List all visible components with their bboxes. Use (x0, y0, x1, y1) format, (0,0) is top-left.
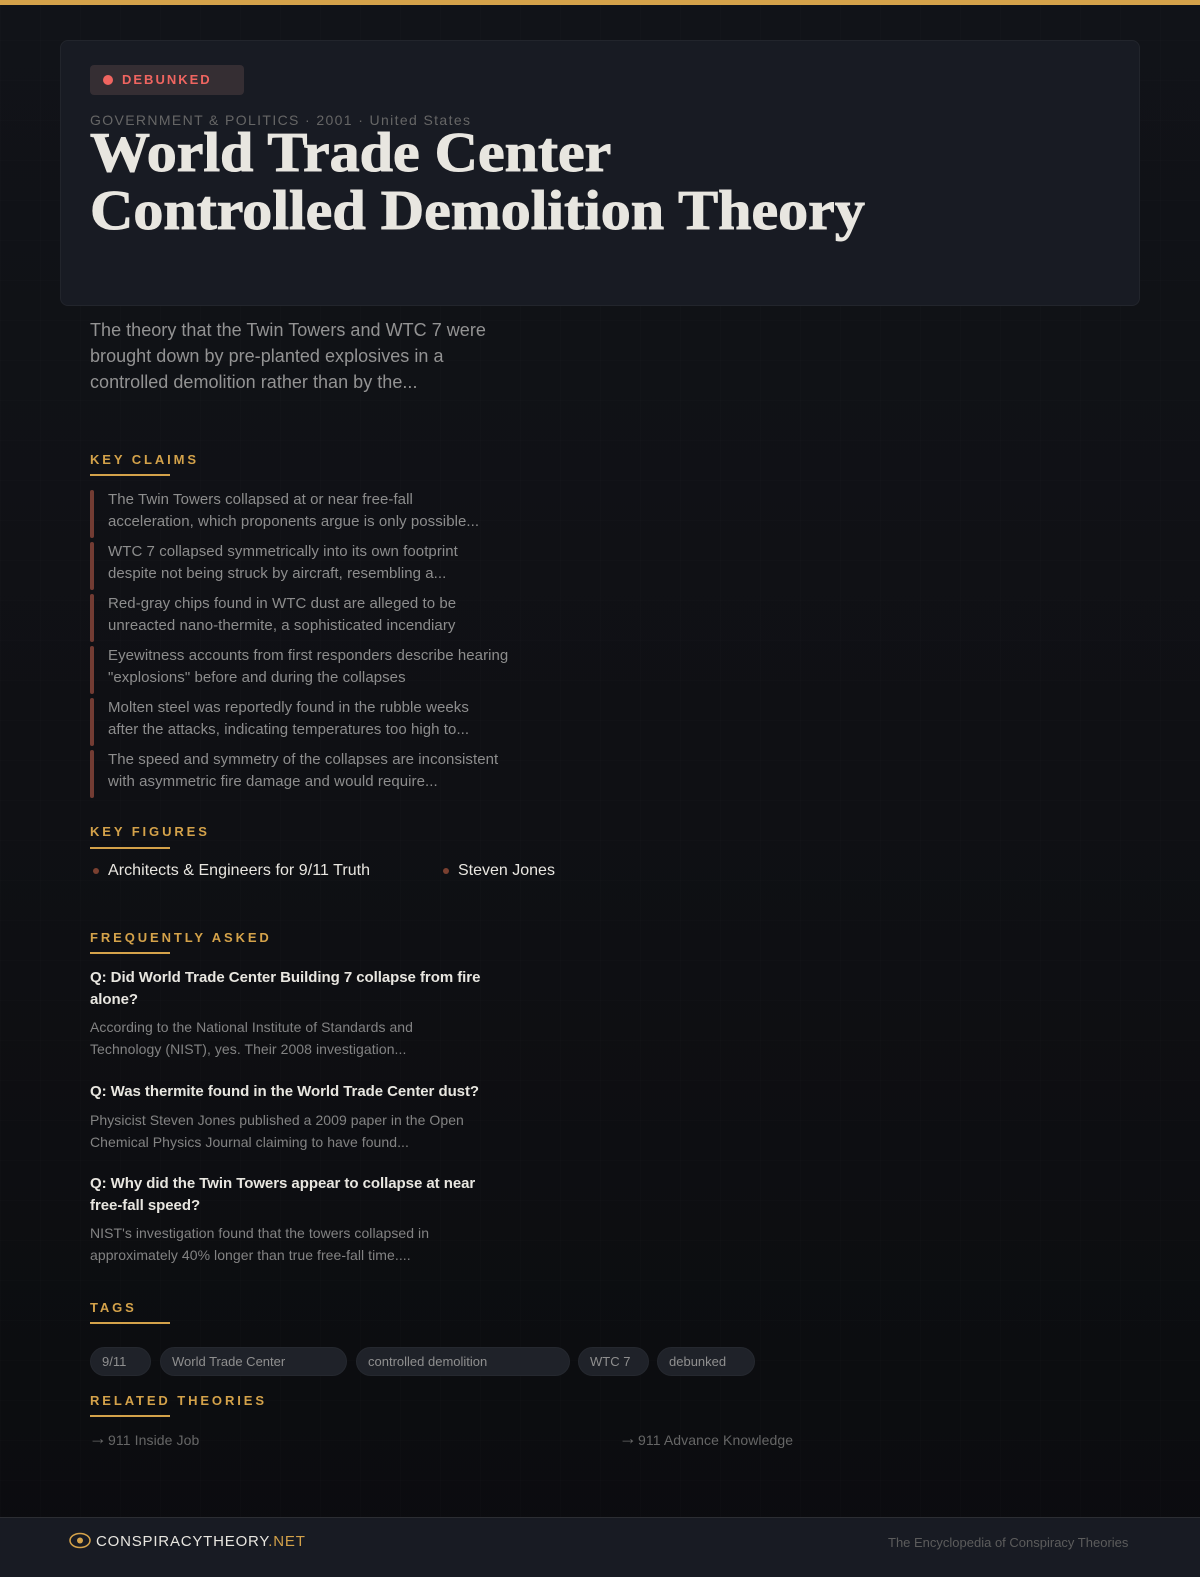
footer (0, 1517, 1200, 1577)
tag (356, 1347, 570, 1376)
faq 3: approximately 40% longer than true free-fall time.... (90, 1247, 411, 1263)
faq 1: alone? (90, 991, 138, 1008)
related link 2: → (619, 1428, 637, 1448)
faq 1: According to the National Institute of Standards and (90, 1019, 413, 1035)
tag: World Trade Center (172, 1354, 285, 1369)
claim 6: with asymmetric fire damage and would require... (108, 773, 438, 790)
related link 1: → (89, 1428, 107, 1448)
claim 1: The Twin Towers collapsed at or near free-fall (108, 491, 413, 508)
title: Controlled Demolition Theory (90, 180, 865, 242)
faq 2: Physicist Steven Jones published a 2009 paper in the Open (90, 1112, 464, 1128)
heading: key claims: KEY CLAIMS (90, 452, 199, 467)
claim 3: unreacted nano-thermite, a sophisticated incendiary (108, 617, 455, 634)
claim 1 (90, 490, 479, 538)
related link 1 (89, 1428, 199, 1448)
claim 3 (90, 594, 456, 642)
tag (657, 1347, 755, 1376)
summary text: brought down by pre-planted explosives in a (90, 346, 444, 366)
claim 6 (90, 750, 498, 798)
heading: frequently asked: FREQUENTLY ASKED (90, 930, 272, 945)
related link 2: 911 Advance Knowledge (638, 1432, 793, 1448)
summary text: controlled demolition rather than by the... (90, 372, 417, 392)
claim 2: despite not being struck by aircraft, resembling a... (108, 565, 446, 582)
tag: WTC 7 (590, 1354, 630, 1369)
tag: controlled demolition (368, 1354, 487, 1369)
claim 3: Red-gray chips found in WTC dust are alleged to be (108, 595, 456, 612)
claim 4: Eyewitness accounts from first responders describe hearing (108, 647, 508, 664)
faq 3: Q: Why did the Twin Towers appear to collapse at near (90, 1175, 475, 1192)
claim 4 (90, 646, 508, 694)
claim 5: Molten steel was reportedly found in the rubble weeks (108, 699, 469, 716)
summary text: The theory that the Twin Towers and WTC 7 were (90, 320, 486, 340)
claim 2: WTC 7 collapsed symmetrically into its own footprint (108, 543, 458, 560)
related link 1: 911 Inside Job (108, 1432, 199, 1448)
panel: header card (60, 40, 1140, 306)
faq 1: Q: Did World Trade Center Building 7 collapse from fire (90, 969, 480, 986)
faq 2: Q: Was thermite found in the World Trade Center dust? (90, 1083, 479, 1100)
faq 2 (90, 1083, 479, 1150)
wordmark: CONSPIRACYTHEORY.NET (96, 1533, 306, 1550)
panel: key claims list (90, 490, 508, 798)
title (90, 122, 865, 242)
tag: debunked (669, 1354, 726, 1369)
tag (578, 1347, 649, 1376)
category and date line: GOVERNMENT & POLITICS · 2001 · United States (90, 112, 471, 128)
figure: Architects & Engineers: Architects & Engineers for 9/11 Truth (108, 862, 370, 879)
claim 4: "explosions" before and during the collapses (108, 669, 406, 686)
heading: tags: TAGS (90, 1300, 137, 1315)
footer tagline: The Encyclopedia of Conspiracy Theories (888, 1535, 1128, 1550)
faq 3: NIST's investigation found that the towers collapsed in (90, 1225, 429, 1241)
faq 1: Technology (NIST), yes. Their 2008 investigation... (90, 1041, 406, 1057)
tag pills (90, 1347, 755, 1376)
tag: 9/11 (102, 1354, 126, 1369)
faq 3: free-fall speed? (90, 1197, 200, 1214)
faq 3 (90, 1175, 475, 1263)
claim 6: The speed and symmetry of the collapses are inconsistent (108, 751, 498, 768)
heading: key figures: KEY FIGURES (90, 824, 210, 839)
badge label: DEBUNKED (122, 72, 212, 87)
status badge: debunked (90, 65, 244, 95)
claim 1: acceleration, which proponents argue is only possible... (108, 513, 479, 530)
figure: Steven Jones: Steven Jones (458, 862, 555, 879)
heading: related theories: RELATED THEORIES (90, 1393, 267, 1408)
summary text (90, 320, 486, 392)
top accent bar (0, 0, 1200, 5)
icon: status dot (103, 75, 113, 85)
tag (160, 1347, 347, 1376)
claim 5: after the attacks, indicating temperatures too high to... (108, 721, 469, 738)
faq 2: Chemical Physics Journal claiming to have found... (90, 1134, 409, 1150)
claim 5 (90, 698, 469, 746)
tag (90, 1347, 151, 1376)
faq 1 (90, 969, 480, 1057)
title: World Trade Center (90, 122, 611, 184)
claim 2 (90, 542, 458, 590)
icon: eye logo (69, 1532, 91, 1548)
